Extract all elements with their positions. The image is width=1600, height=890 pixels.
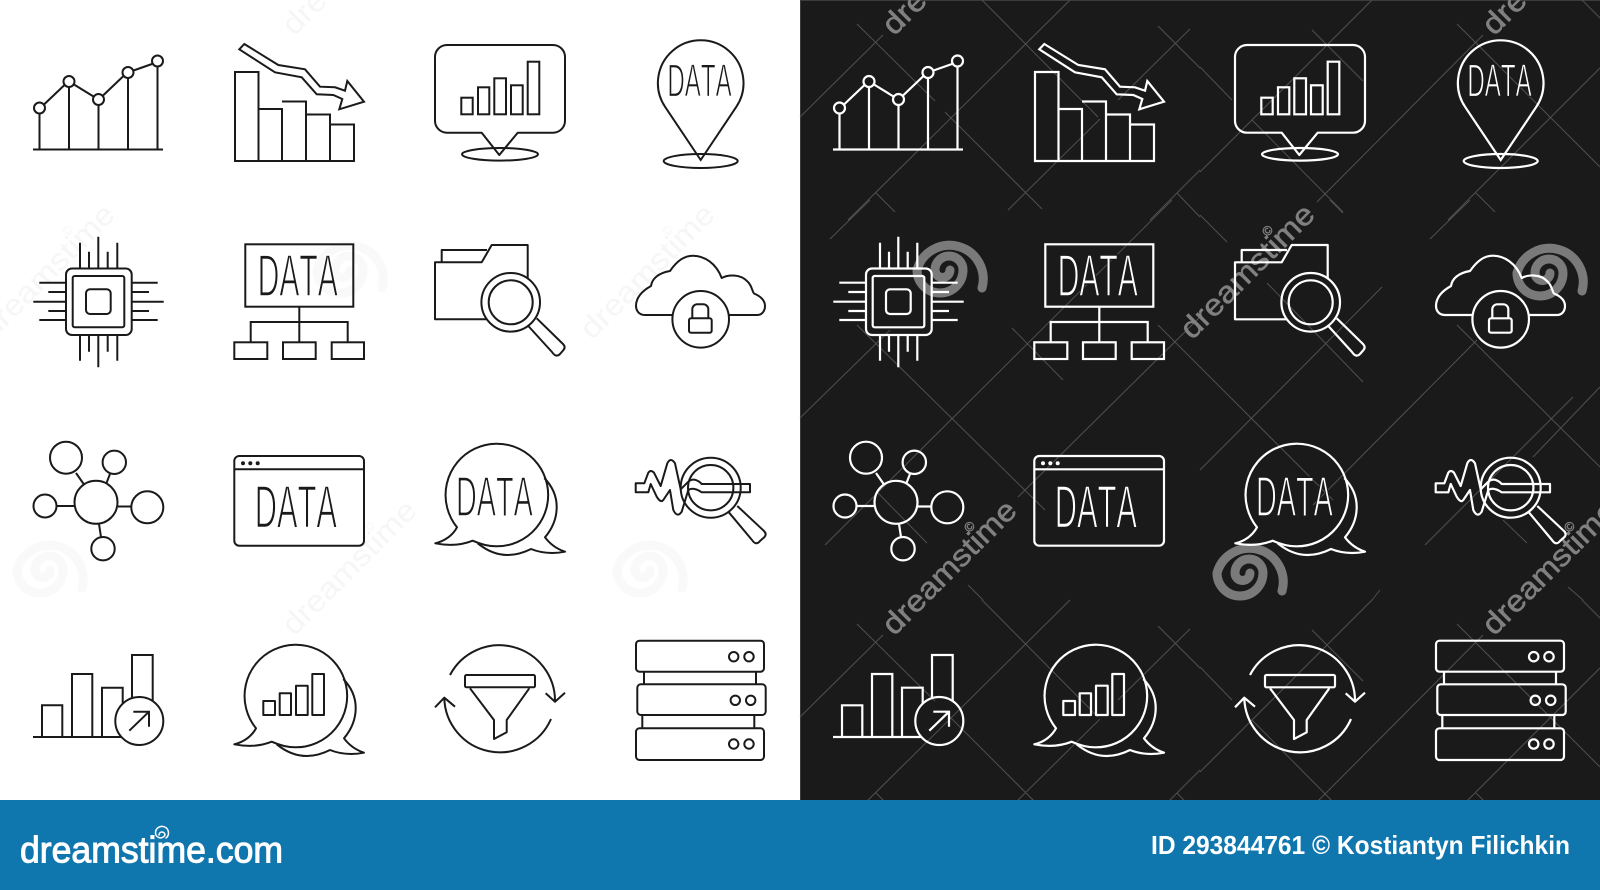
watermark: light panel: © bbox=[59, 222, 76, 239]
icon: server stack bbox=[636, 641, 766, 760]
credit: image ID and author: ID 293844761 © Kostiantyn Filichkin bbox=[1151, 830, 1570, 860]
icon: cloud with padlock (dark) bbox=[1436, 256, 1565, 348]
text: DATA bubble label: DATA bbox=[456, 464, 533, 528]
watermark: light panel bbox=[0, 0, 722, 642]
icon: bars with growth arrow bbox=[33, 655, 163, 745]
icon: map pin with DATA bbox=[658, 40, 744, 168]
icon: folder with magnifier bbox=[435, 245, 565, 356]
watermark: light panel: dreamstime bbox=[276, 494, 424, 642]
icon: speech pin with bars bbox=[435, 45, 565, 161]
icon: folder with magnifier (dark) bbox=[1235, 245, 1365, 356]
panel: light icon grid bbox=[0, 0, 800, 800]
watermark: light panel: © bbox=[659, 222, 676, 239]
icon: speech bubbles with bars (dark) bbox=[1034, 645, 1164, 756]
watermark: light panel: © bbox=[361, 518, 378, 535]
text: DATA board label: DATA bbox=[258, 243, 338, 308]
icon: microchip bbox=[33, 237, 164, 367]
footer bar bbox=[0, 800, 1600, 890]
text: DATA window label (dark): DATA bbox=[1055, 475, 1137, 541]
icon: pulse wave under magnifier bbox=[636, 458, 766, 543]
icon: speech bubbles with DATA bbox=[435, 444, 565, 555]
icon: browser window with DATA bbox=[234, 456, 364, 546]
icon: data hierarchy board bbox=[234, 243, 364, 359]
icon: falling bar chart with arrow (dark) bbox=[1035, 44, 1164, 161]
watermark: dark panel lattice, spirals and text: dreamstime bbox=[876, 494, 1024, 642]
watermark: light panel: dreamstime bbox=[574, 198, 722, 346]
icon: speech bubbles with bars bbox=[234, 645, 364, 756]
icon: funnel with refresh arrows bbox=[435, 645, 565, 752]
text: DATA board label (dark): DATA bbox=[1058, 243, 1138, 308]
icon: network nodes (dark) bbox=[834, 442, 963, 560]
icon: network nodes bbox=[34, 442, 163, 560]
icon: line chart (dark) bbox=[833, 56, 963, 150]
logo: dreamstime.com: dreamstime.com bbox=[20, 830, 283, 871]
icon: speech pin with bars (dark) bbox=[1235, 45, 1365, 161]
text: DATA pin label: DATA bbox=[667, 54, 732, 107]
icon: funnel with refresh arrows (dark) bbox=[1235, 645, 1365, 752]
icon: speech bubbles with DATA (dark) bbox=[1235, 444, 1365, 555]
watermark: dark panel lattice, spirals and text bbox=[800, 0, 1600, 820]
icon: browser window with DATA (dark) bbox=[1034, 456, 1164, 546]
icon: map pin with DATA (dark) bbox=[1458, 40, 1544, 168]
icon: line chart bbox=[33, 56, 163, 150]
icon: bars with growth arrow (dark) bbox=[833, 655, 963, 745]
watermark: dark panel lattice, spirals and text: © bbox=[961, 518, 978, 535]
text: DATA bubble label (dark): DATA bbox=[1256, 464, 1333, 528]
text: DATA pin label (dark): DATA bbox=[1467, 54, 1532, 107]
icon: microchip (dark) bbox=[833, 237, 964, 367]
icon: data hierarchy board (dark) bbox=[1034, 243, 1164, 359]
icon: server stack (dark) bbox=[1436, 641, 1566, 760]
icon: cloud with padlock bbox=[636, 256, 765, 348]
text: DATA window label: DATA bbox=[255, 475, 337, 541]
watermark: dark panel lattice, spirals and text: dreamstime bbox=[1174, 198, 1322, 346]
icon: pulse wave under magnifier (dark) bbox=[1436, 458, 1566, 543]
watermark: dark panel lattice, spirals and text: © bbox=[1259, 222, 1276, 239]
icon: falling bar chart with arrow bbox=[235, 44, 364, 161]
panel: dark icon grid bbox=[800, 0, 1600, 820]
watermark: dark panel lattice, spirals and text: © bbox=[1561, 518, 1578, 535]
